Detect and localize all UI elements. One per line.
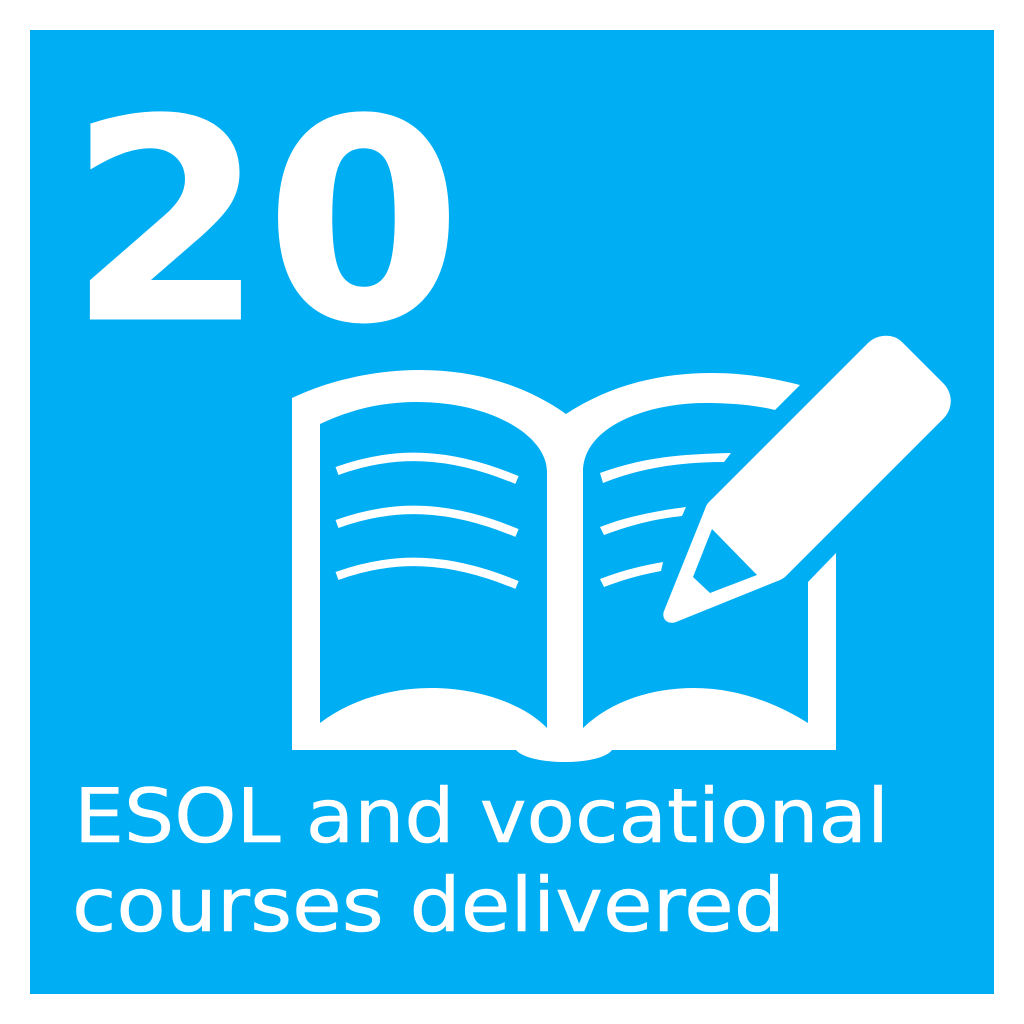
book outer <box>292 370 836 762</box>
pencil <box>663 336 951 623</box>
left page lines <box>337 457 517 585</box>
number: 20: 20 <box>68 60 462 385</box>
right page lines <box>600 453 731 587</box>
caption line 1: ESOL and vocational <box>74 772 889 860</box>
caption line 2: courses delivered <box>72 861 785 949</box>
icon: open book with pencil <box>292 336 951 762</box>
caption <box>72 772 889 949</box>
